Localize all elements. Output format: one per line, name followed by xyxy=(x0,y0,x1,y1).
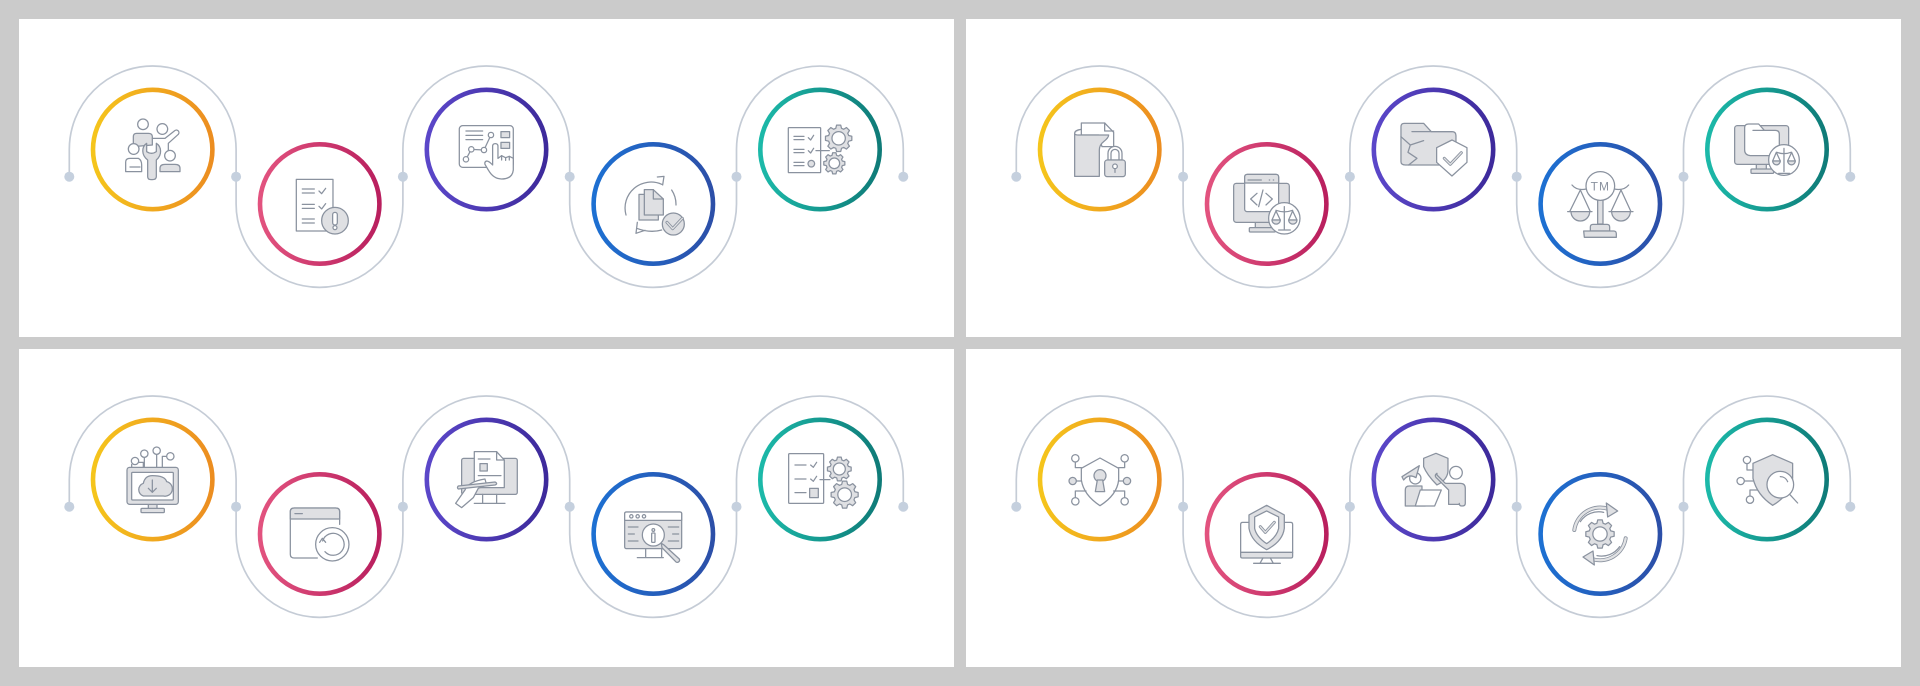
icon: circuit shield with keyhole xyxy=(1069,455,1131,506)
panel: bottom left timeline xyxy=(19,349,954,667)
icon: checklist with gears xyxy=(788,125,852,174)
icon: broken folder with shield xyxy=(1401,123,1467,176)
icon: checklist form with gears xyxy=(789,454,858,508)
icon: team with wrench xyxy=(126,119,180,180)
ring: blue xyxy=(1541,144,1660,264)
icon: presentation board with hand xyxy=(459,126,513,179)
ring: blue xyxy=(594,144,713,264)
icon: cloud download monitor xyxy=(127,447,178,513)
ring: pink xyxy=(260,474,379,594)
icon: hand signing document on monitor xyxy=(456,452,517,508)
connector line with dots xyxy=(64,396,908,617)
ring: pink xyxy=(1207,474,1326,594)
ring: purple xyxy=(1374,90,1493,209)
ring: purple xyxy=(427,90,546,209)
ring: teal xyxy=(1707,90,1827,209)
icon: code window with scales xyxy=(1234,174,1300,234)
panel: top left timeline xyxy=(19,19,954,337)
connector line with dots xyxy=(1011,66,1855,287)
icon: monitor folder with scales xyxy=(1735,124,1799,175)
ring: pink xyxy=(1207,144,1326,264)
connector line with dots xyxy=(64,66,908,287)
icon: file folder with lock xyxy=(1075,123,1125,177)
ring: purple xyxy=(1374,420,1493,539)
panel: top right timeline xyxy=(966,19,1901,337)
icon: document cycle with check xyxy=(625,176,684,235)
icon: trademark scales xyxy=(1568,172,1633,237)
ring: blue xyxy=(1541,474,1660,594)
ring: yellow xyxy=(93,90,212,209)
ring: teal xyxy=(760,420,880,539)
connector line with dots xyxy=(1011,396,1855,617)
ring: blue xyxy=(594,474,713,594)
icon: shield with magnifier and nodes xyxy=(1737,455,1798,505)
icon: gear with rotation arrows xyxy=(1574,503,1626,565)
text: TM: TM xyxy=(1591,179,1610,193)
ring: purple xyxy=(427,420,546,539)
ring: yellow xyxy=(1040,420,1159,539)
ring: teal xyxy=(760,90,880,209)
ring: yellow xyxy=(93,420,212,539)
icon: window with refresh xyxy=(290,508,349,561)
icon: info window with magnifier xyxy=(625,512,682,562)
icon: monitor with shield check xyxy=(1241,505,1293,563)
ring: yellow xyxy=(1040,90,1159,209)
icon: student and teacher with shield xyxy=(1402,453,1465,506)
icon: checklist with warning xyxy=(296,179,348,234)
ring: teal xyxy=(1707,420,1827,539)
ring: pink xyxy=(260,144,379,264)
panel: bottom right timeline xyxy=(966,349,1901,667)
